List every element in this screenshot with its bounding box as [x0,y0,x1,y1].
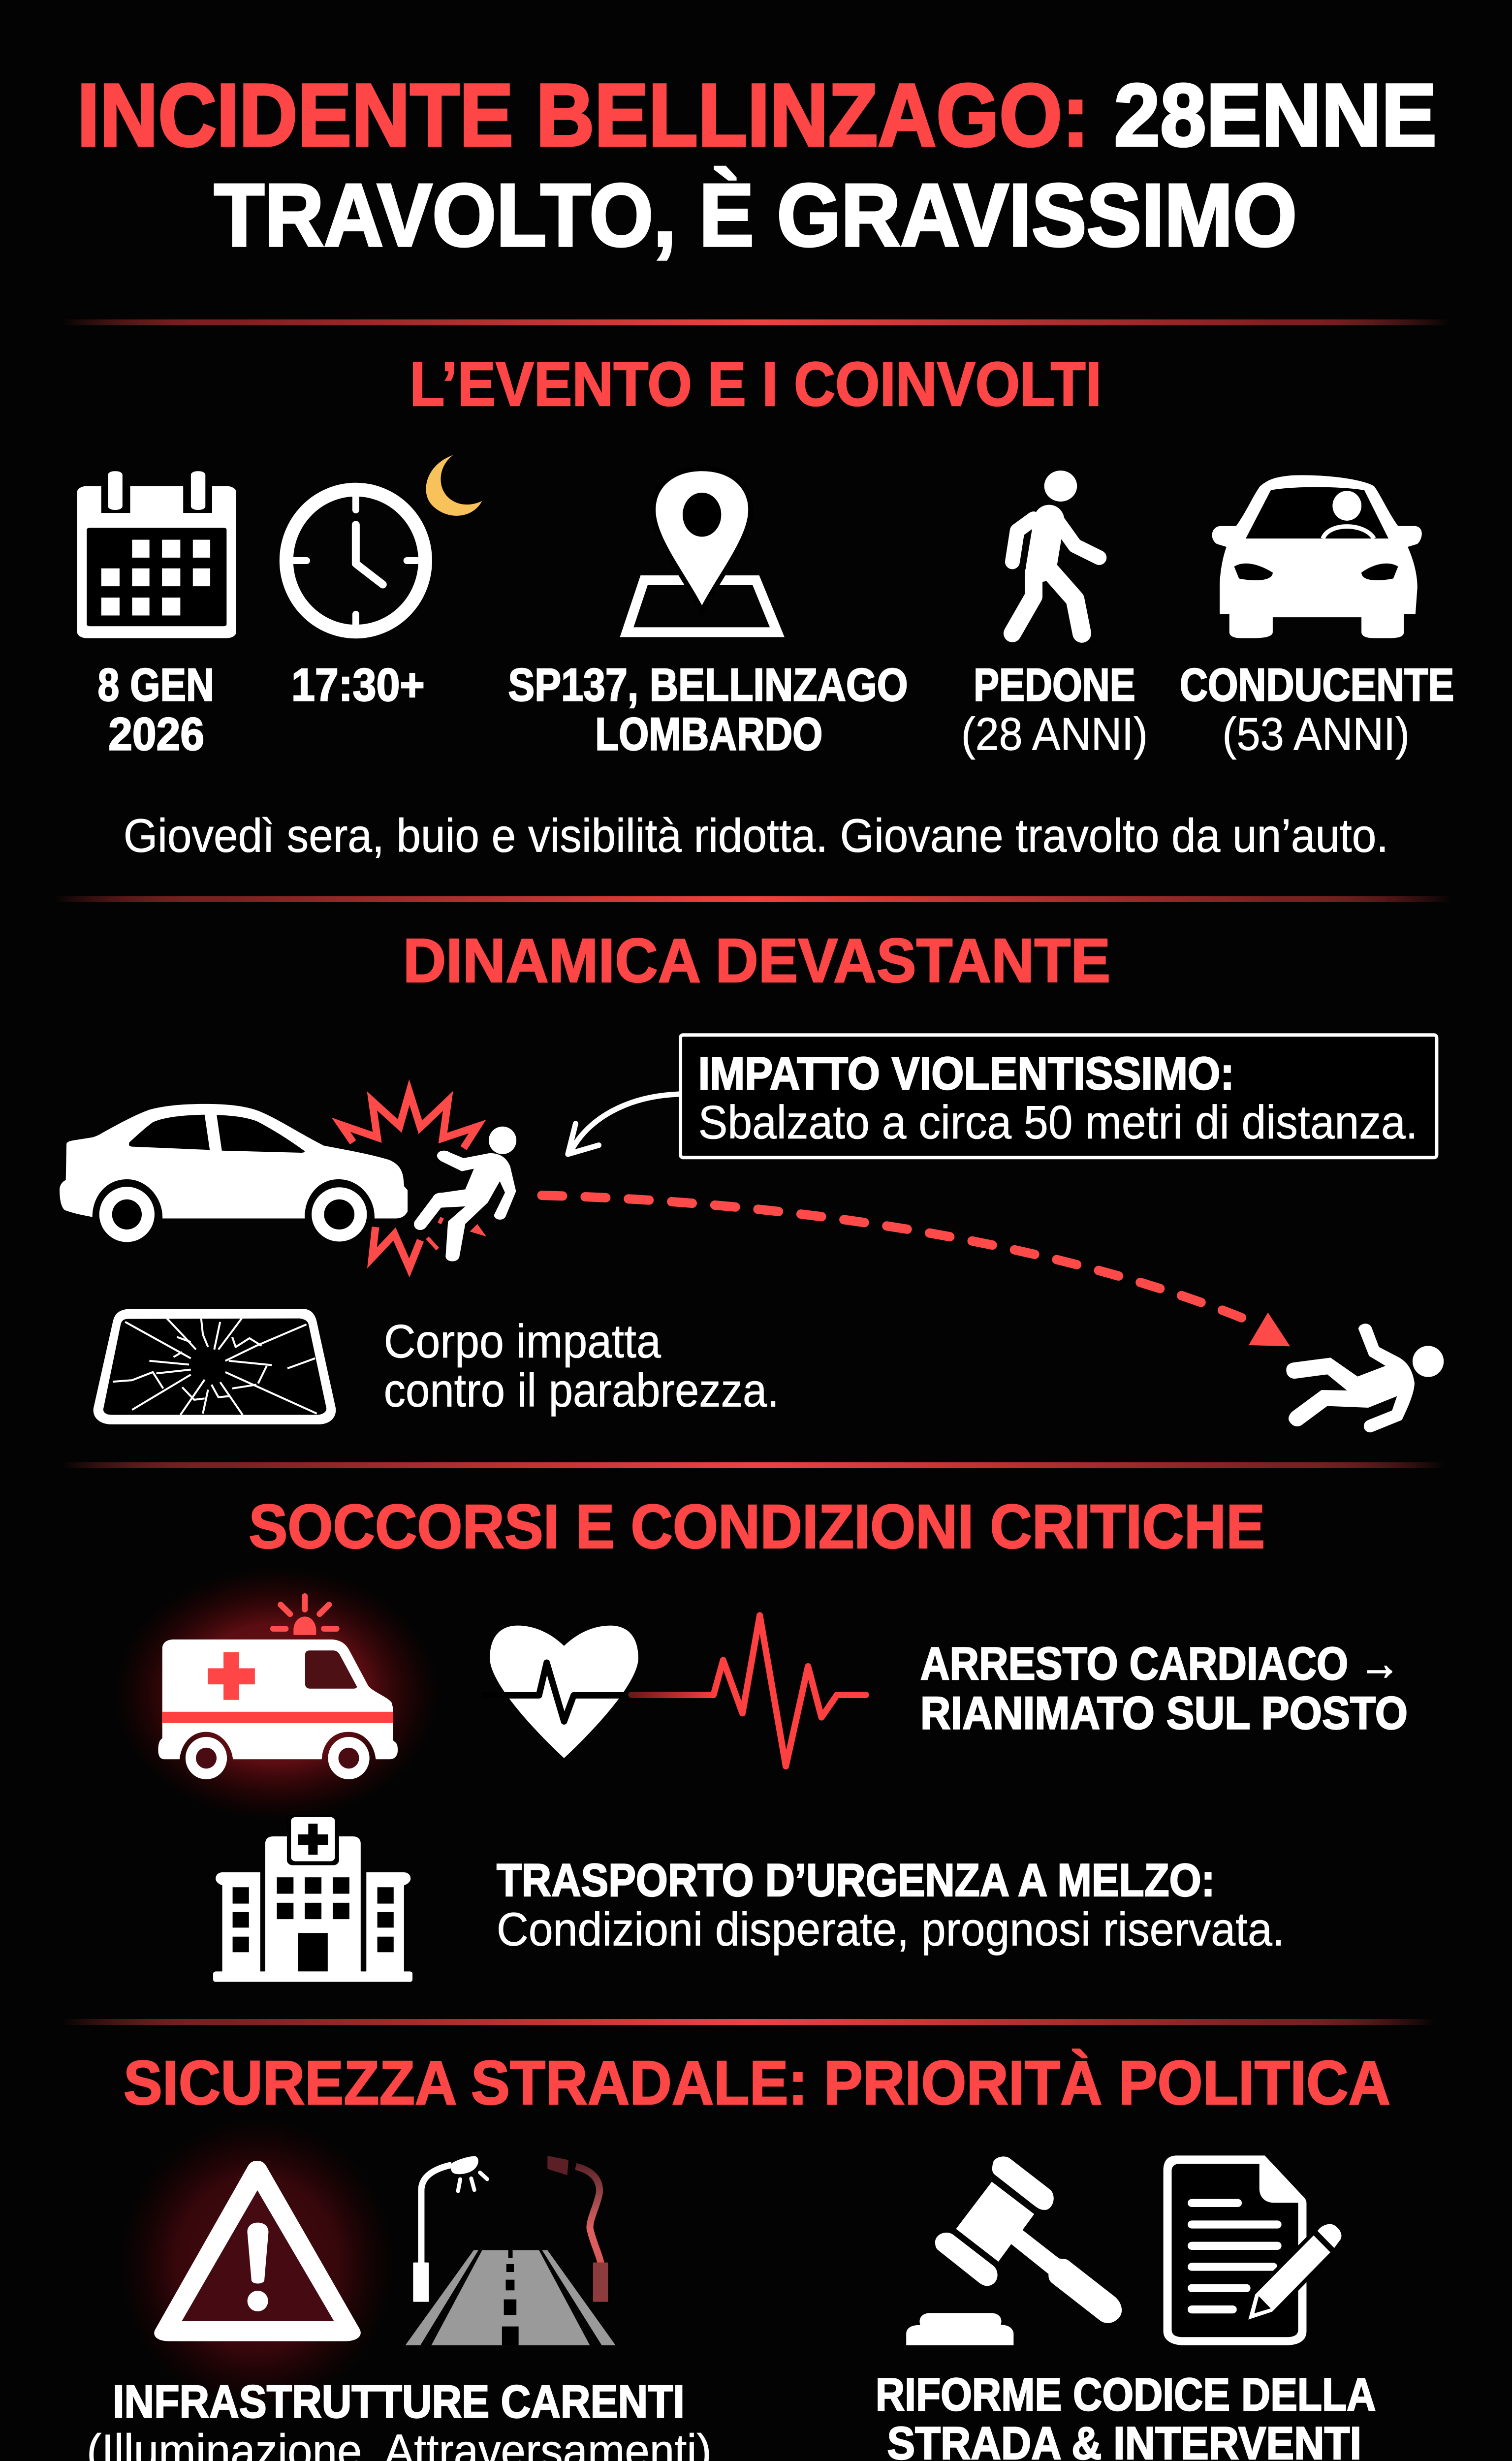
heading: sicurezza: SICUREZZA STRADALE: PRIORITÀ POLITICA [124,2048,1390,2117]
icon: fallen pedestrian [1286,1324,1444,1432]
panel: sicurezza stradale [67,2048,1446,2461]
icon: car with driver [1212,475,1422,638]
text: summary sentence: Giovedì sera, buio e visibilità ridotta. Giovane travolto da un’auto. [124,810,1388,862]
callout: impatto [681,1035,1437,1158]
icon labels: PEDONE [974,659,1135,711]
heading: soccorsi: SOCCORSI E CONDIZIONI CRITICHE [249,1492,1265,1561]
text: trasporto: TRASPORTO D’URGENZA A MELZO: [497,1854,1215,1906]
icon labels: (53 ANNI) [1223,708,1410,759]
title: TRAVOLTO, È GRAVISSIMO [214,166,1297,265]
text: infrastrutture carenti: INFRASTRUTTURE CARENTI [113,2375,685,2427]
icon: calendar [77,471,236,638]
icon labels: 17:30+ [291,659,425,711]
icon labels: 8 GEN [98,659,214,711]
icon: document with pencil [1164,2155,1341,2345]
icon: warning triangle [119,2116,395,2412]
text: trasporto [497,1854,1285,1956]
icon: clock with moon [286,455,482,632]
icon labels: (28 ANNI) [961,708,1148,759]
text: arresto cardiaco: RIANIMATO SUL POSTO [920,1687,1408,1738]
icon labels: CONDUCENTE [1180,659,1454,711]
callout: impatto: Sbalzato a circa 50 metri di distanza. [698,1096,1418,1149]
heading: dinamica: DINAMICA DEVASTANTE [403,926,1110,995]
panel: l'evento e i coinvolti [77,349,1454,862]
icon: road with street lamps [405,2156,616,2345]
text: trasporto: Condizioni disperate, prognosi riservata. [497,1903,1285,1956]
text: windshield impact: contro il parabrezza. [384,1364,779,1417]
text: windshield impact [384,1315,779,1417]
icon: heart with ecg [482,1615,866,1767]
text: windshield impact: Corpo impatta [384,1315,662,1368]
title [77,66,1437,265]
icon: car side [60,1104,408,1242]
icon: hospital [213,1815,412,1982]
icon labels: SP137, BELLINZAGO [508,659,908,711]
panel: dinamica devastante [60,926,1444,1432]
callout: impatto: IMPATTO VIOLENTISSIMO: [698,1047,1234,1099]
arrow: dashed trajectory [542,1196,1290,1346]
icon: cracked windshield [94,1309,336,1424]
arrow: callout to pedestrian [568,1094,679,1154]
icon: ambulance [114,1567,440,1821]
title: 28ENNE [1114,66,1437,165]
text: riforme: RIFORME CODICE DELLA [876,2368,1376,2420]
title: INCIDENTE BELLINZAGO: [77,66,1089,165]
icon: pedestrian [1012,471,1099,633]
icon labels: LOMBARDO [595,708,822,759]
icon: gavel [906,2156,1122,2345]
text: infrastrutture carenti [87,2375,712,2461]
text: arresto cardiaco [920,1638,1408,1738]
icon: pedestrian hit [414,1127,516,1262]
heading: l'evento: L’EVENTO E I COINVOLTI [410,349,1102,419]
icon labels [98,659,1454,759]
text: arresto cardiaco: ARRESTO CARDIACO → [920,1638,1400,1689]
icon: impact burst [341,1092,486,1268]
icon: map pin [627,471,777,632]
panel: soccorsi [114,1492,1408,1982]
text: riforme [855,2368,1395,2461]
icon labels: 2026 [108,708,204,759]
